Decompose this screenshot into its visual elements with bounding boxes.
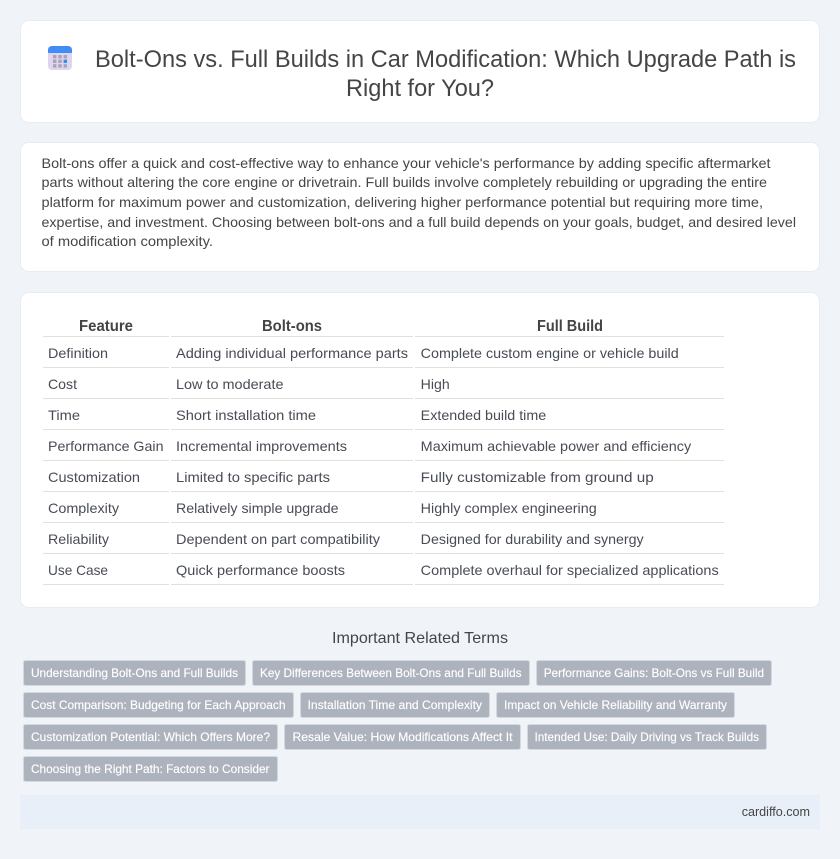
row: complexity: Complexity <box>48 500 119 516</box>
row: performance gain: Maximum achievable power and efficiency <box>421 438 691 454</box>
row: cost: Cost <box>48 376 77 392</box>
related term tags: Performance Gains: Bolt-Ons vs Full Build <box>544 666 764 680</box>
panel: introduction text: parts without altering the core engine or drivetrain. Full builds involve completely rebuilding or upgrading the entire <box>42 174 767 190</box>
panel: introduction text <box>20 142 820 272</box>
heading: important related terms: Important Related Terms <box>332 630 508 647</box>
row: reliability: Reliability <box>48 531 109 547</box>
row: reliability: Designed for durability and synergy <box>421 531 644 547</box>
row: time <box>48 407 546 423</box>
row: complexity: Relatively simple upgrade <box>176 500 339 516</box>
row: reliability: Dependent on part compatibility <box>176 531 380 547</box>
panel: introduction text: expertise, and investment. Choosing between bolt-ons and a full build depends on your goals, budget, and desired level <box>42 214 796 230</box>
related term tags: Understanding Bolt-Ons and Full Builds <box>31 666 238 680</box>
icon: calendar grid <box>48 46 72 70</box>
row: time: Short installation time <box>176 407 316 423</box>
related term tags: Customization Potential: Which Offers More? <box>31 730 270 744</box>
title: Right for You? <box>346 75 494 102</box>
panel: introduction text: platform for maximum power and customization, delivering higher performance potential but requiring more time, <box>42 194 763 210</box>
row: cost <box>48 376 450 392</box>
row: definition: Definition <box>48 345 108 361</box>
footer bar: cardiffo.com <box>742 804 810 819</box>
panel: introduction text: Bolt-ons offer a quick and cost-effective way to enhance your vehicle's performance by adding specific aftermarket <box>42 155 771 171</box>
related term tags: Cost Comparison: Budgeting for Each Approach <box>31 698 286 712</box>
table header row: Full Build <box>537 318 603 335</box>
row: reliability <box>48 531 644 547</box>
row: performance gain: Performance Gain <box>48 438 164 454</box>
row: customization: Limited to specific parts <box>176 469 330 485</box>
row: use case: Quick performance boosts <box>176 562 345 578</box>
row: definition <box>48 345 679 361</box>
related term tags <box>24 660 772 782</box>
row: complexity: Highly complex engineering <box>421 500 597 516</box>
panel: introduction text: of modification complexity. <box>42 233 213 249</box>
related term tags: Impact on Vehicle Reliability and Warranty <box>504 698 727 712</box>
related term tags: Intended Use: Daily Driving vs Track Builds <box>534 730 759 744</box>
row: definition: Adding individual performance parts <box>176 345 408 361</box>
row: complexity <box>48 500 597 516</box>
row: use case <box>48 562 719 578</box>
row: customization <box>48 469 654 485</box>
table header row: Feature <box>79 318 133 335</box>
footer bar <box>20 795 820 829</box>
row: performance gain: Incremental improvements <box>176 438 347 454</box>
table header row <box>79 318 603 335</box>
row: cost: High <box>421 376 450 392</box>
table header row: Bolt-ons <box>262 318 322 335</box>
related term tags: Installation Time and Complexity <box>308 698 482 712</box>
row: time: Time <box>48 407 80 423</box>
title: Bolt-Ons vs. Full Builds in Car Modification: Which Upgrade Path is <box>95 46 796 73</box>
panel: title header <box>20 20 820 122</box>
row: time: Extended build time <box>421 407 546 423</box>
row: performance gain <box>48 438 691 454</box>
title <box>95 46 796 102</box>
related term tags: Key Differences Between Bolt-Ons and Full Builds <box>260 666 522 680</box>
row: customization: Customization <box>48 469 140 485</box>
row: use case: Use Case <box>48 562 108 578</box>
row: use case: Complete overhaul for specialized applications <box>421 562 719 578</box>
row: definition: Complete custom engine or vehicle build <box>421 345 679 361</box>
related term tags: Resale Value: How Modifications Affect It <box>292 730 513 744</box>
row: customization: Fully customizable from ground up <box>421 469 654 485</box>
row: cost: Low to moderate <box>176 376 284 392</box>
panel: comparison table <box>20 292 820 608</box>
related term tags: Choosing the Right Path: Factors to Consider <box>31 762 270 776</box>
